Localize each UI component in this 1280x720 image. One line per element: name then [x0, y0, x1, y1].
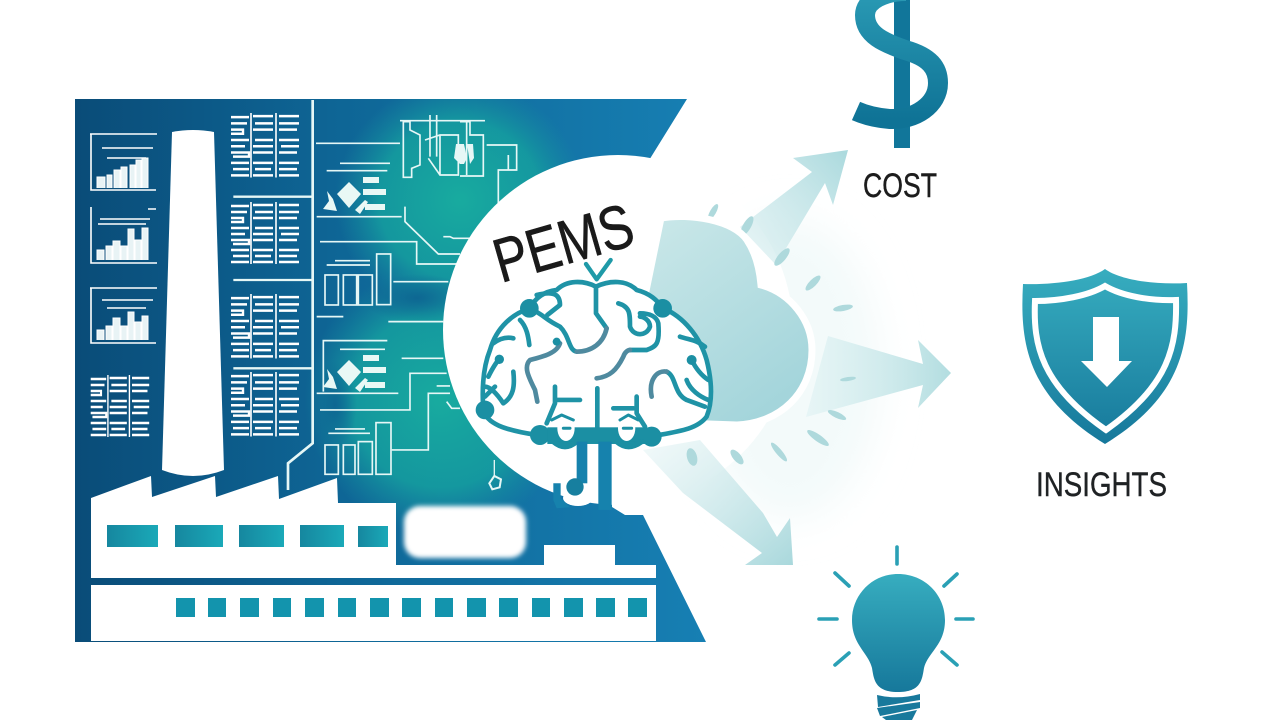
white circle [443, 155, 793, 505]
brain grey folds [527, 328, 667, 402]
glowing furnace window [404, 506, 526, 558]
cloud shape [640, 216, 812, 425]
check mark [586, 260, 611, 279]
circuit diagram lines [233, 100, 517, 490]
icon: light bulb [819, 547, 973, 720]
factory upper windows [107, 525, 388, 547]
icon: dollar sign [856, 0, 938, 148]
brain outline [483, 282, 711, 437]
machine detail [454, 144, 474, 164]
chart thumbnail 3 [90, 288, 157, 343]
arrow: right to insights [806, 336, 951, 417]
text block grids [91, 113, 299, 437]
icon: process diagrams [323, 177, 386, 392]
brain stem [553, 442, 612, 510]
title: PEMS: PEMS [486, 191, 641, 296]
chart thumbnail 1 [90, 134, 157, 190]
chimney [162, 130, 224, 476]
brain icon [476, 260, 711, 510]
chart thumbnail 2 [91, 207, 157, 263]
brain nodes [476, 299, 697, 447]
brain fill [483, 282, 711, 435]
icon: shield [1022, 269, 1188, 444]
label: insights: INSIGHTS [1036, 466, 1167, 504]
small leaf fragments [685, 203, 856, 467]
arrow: down to idea [643, 440, 793, 565]
chart panel lines: left thumbnails [90, 134, 157, 343]
arrow: up to cost [740, 150, 848, 265]
brain lower lobes [552, 415, 638, 441]
label: cost: COST [863, 167, 937, 205]
white lower edge around stem hook [563, 490, 593, 506]
soft tint behind arrows [700, 220, 880, 520]
factory building [91, 130, 656, 641]
panel: factory blueprint background [75, 80, 715, 643]
factory lower windows [176, 598, 647, 617]
